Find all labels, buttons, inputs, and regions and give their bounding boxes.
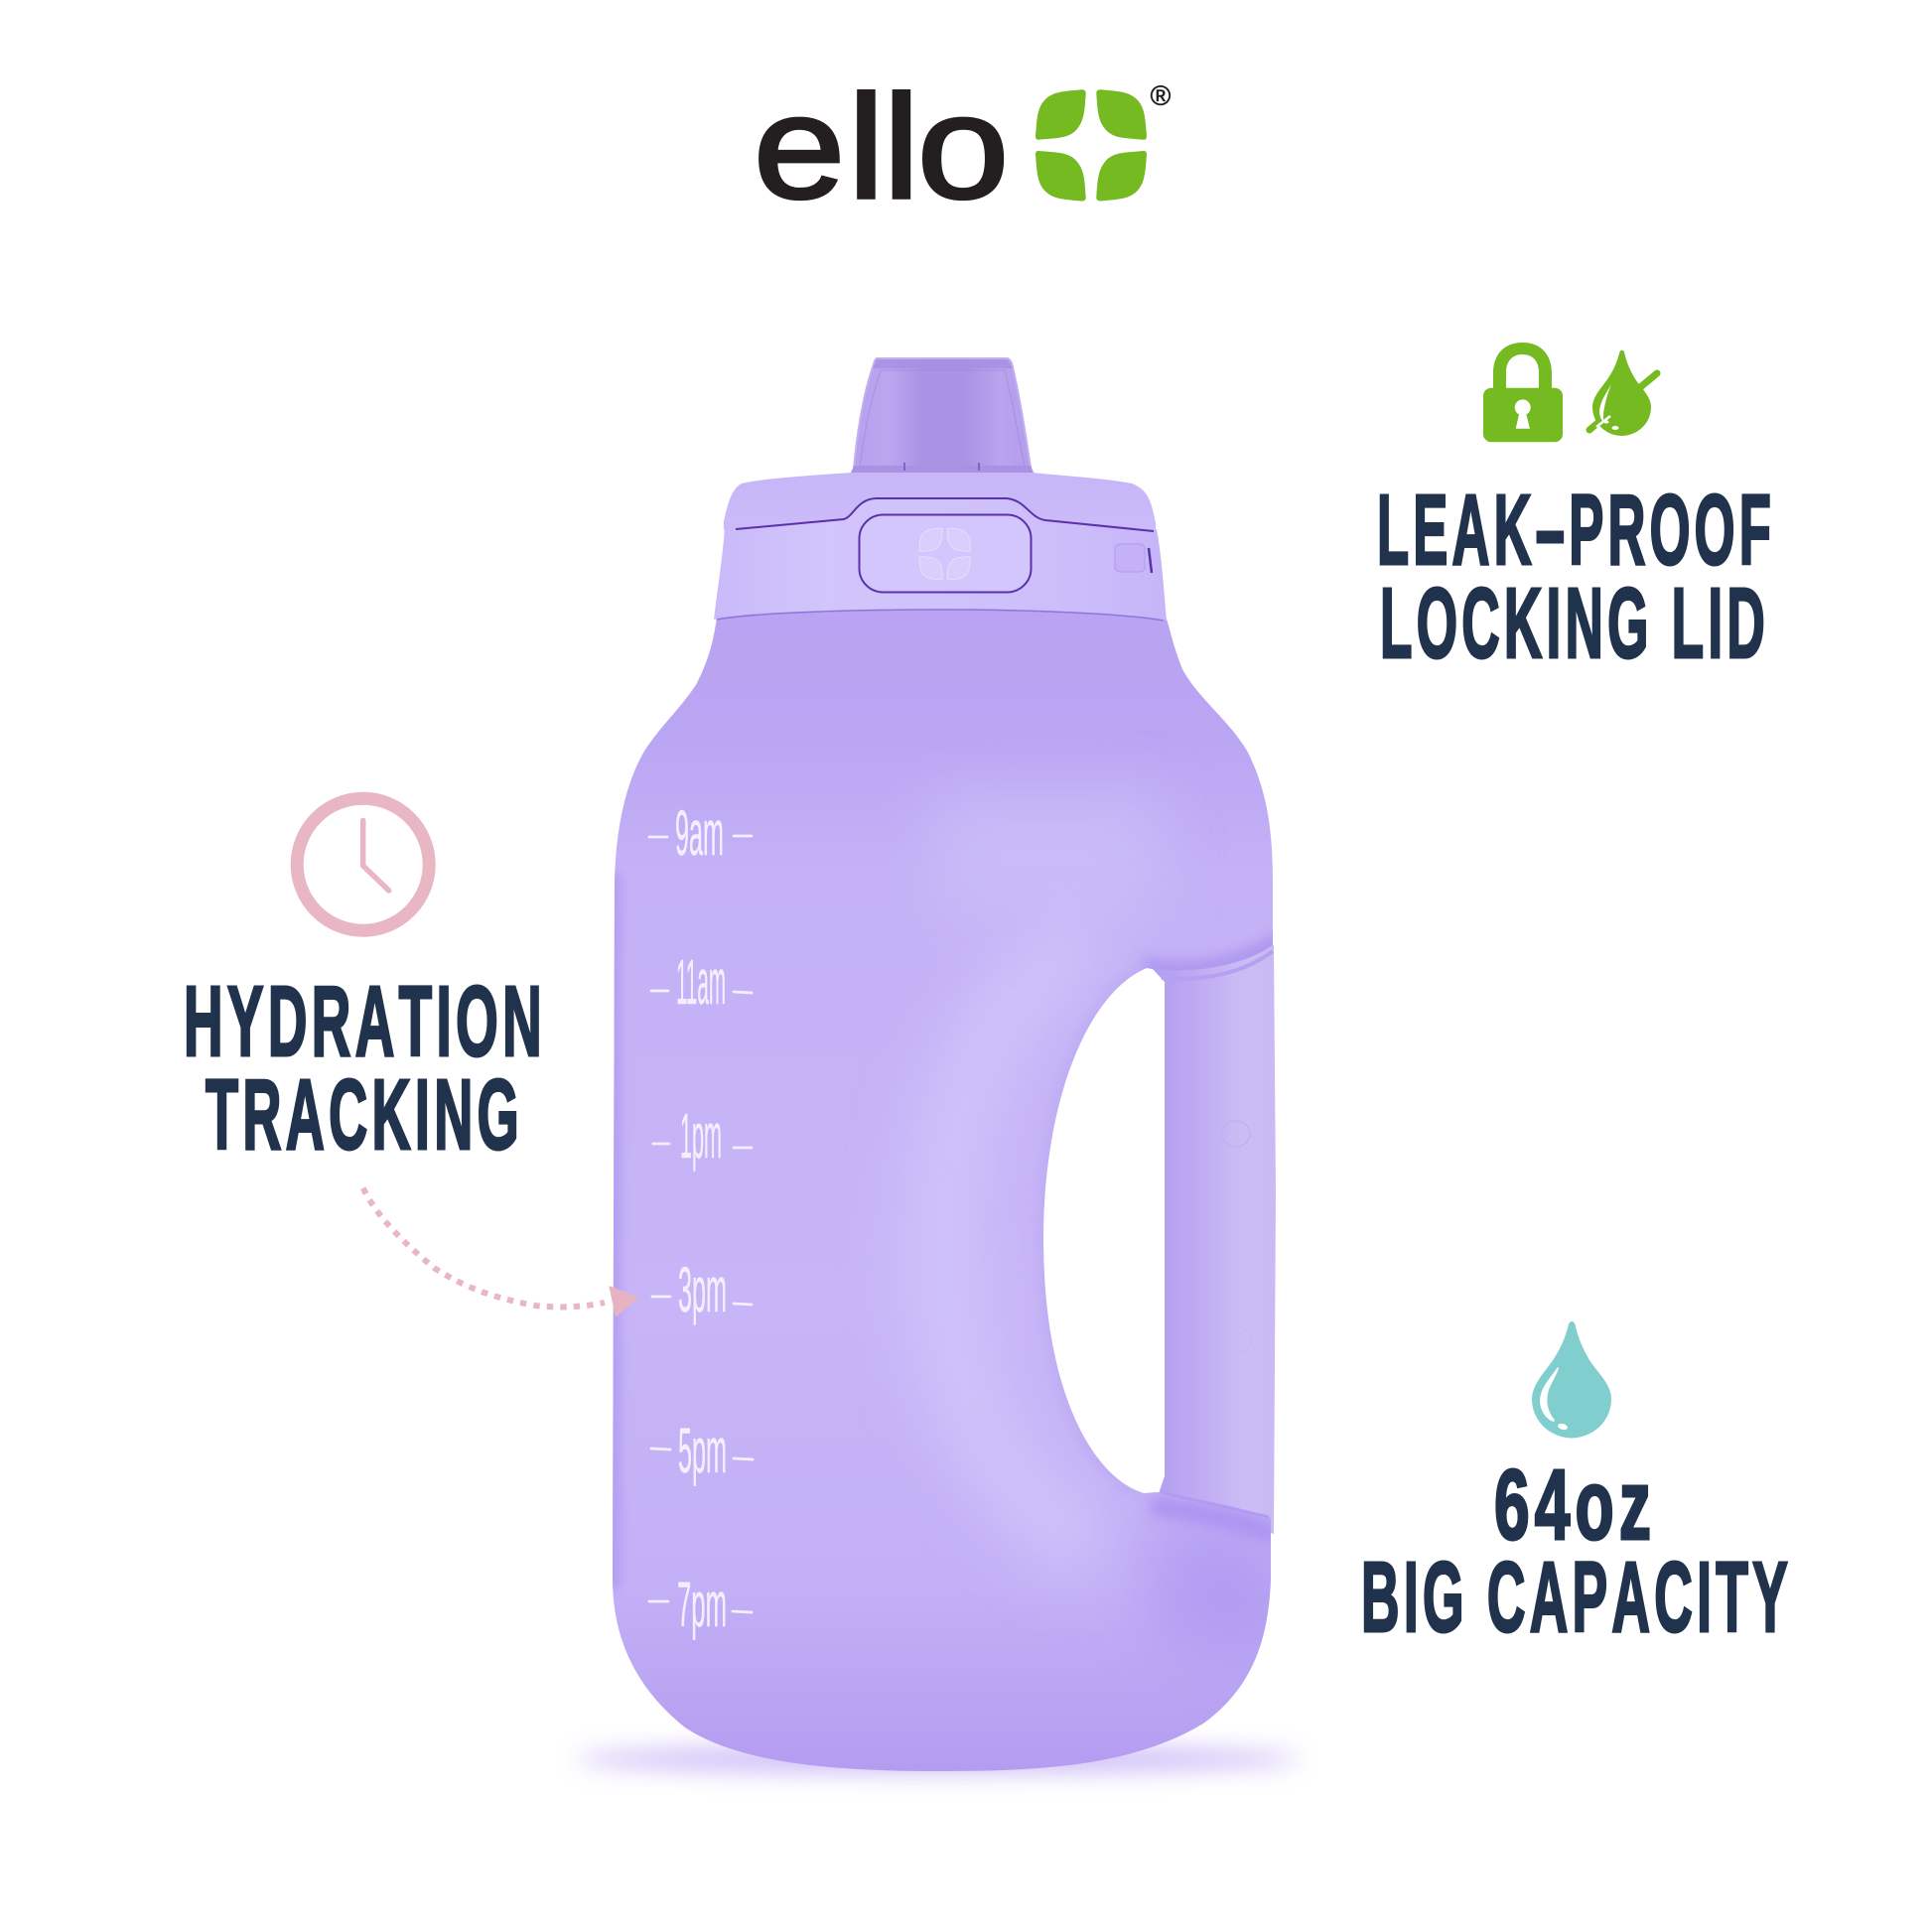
- heading: 64oz: 64oz: [1494, 1449, 1656, 1561]
- lid upper: [724, 473, 1156, 534]
- logo mark: four green leaves: [1035, 89, 1147, 202]
- ground shadow: [576, 1745, 1301, 1773]
- handle dimple top: [1222, 1121, 1250, 1147]
- time marker: 1pm: 1pm: [680, 1100, 722, 1172]
- spout: [851, 358, 1034, 475]
- handle bottom seam shadow: [1162, 1492, 1269, 1517]
- upper light panel: [950, 796, 1146, 895]
- icon: padlock: [1483, 343, 1563, 442]
- logo: ello: [754, 66, 1172, 229]
- upper right shadow: [1142, 938, 1281, 969]
- lid button logo: [919, 528, 970, 580]
- logo wordmark: ello: [754, 66, 1009, 229]
- lid bottom seam: [717, 610, 1164, 621]
- icon: water drop: [1532, 1321, 1611, 1438]
- callout: 64oz big capacity: [1361, 1321, 1792, 1653]
- bottle body: [613, 596, 1273, 1771]
- handle top seam shadow: [1162, 951, 1273, 979]
- time marker: 5pm: [651, 1415, 753, 1486]
- time marker: 5pm: 5pm: [678, 1415, 727, 1486]
- spout inner highlight: [860, 370, 1025, 467]
- lower right shadow: [1148, 1525, 1271, 1666]
- spout base rim: [851, 466, 1034, 474]
- light ridge around handle opening: [943, 933, 1092, 1549]
- time marker: 9am: [649, 797, 752, 869]
- lid seam line: [736, 498, 1154, 531]
- time marker: 3pm: 3pm: [678, 1254, 727, 1325]
- lower seam shadow: [1152, 1505, 1276, 1534]
- lid lower band: [714, 494, 1167, 621]
- left edge shadow: [613, 873, 622, 1590]
- icon: no-leak drop: [1589, 350, 1657, 436]
- time marker: 3pm: [652, 1254, 752, 1325]
- lid side latch: [1115, 544, 1152, 573]
- time marker: 7pm: 7pm: [677, 1569, 727, 1640]
- arrow head: [609, 1286, 639, 1317]
- handle opening edge: [1043, 968, 1147, 1493]
- handle dimple bottom: [1223, 1327, 1251, 1353]
- spout ticks: [904, 463, 979, 471]
- body shading: [606, 794, 1291, 1668]
- bottle: 11am: [676, 946, 726, 1018]
- callout: leak-proof locking lid: [1377, 343, 1775, 679]
- arrow: dotted curve: [363, 1188, 605, 1307]
- bottle: [576, 358, 1301, 1773]
- callout: hydration tracking: [184, 798, 639, 1317]
- spout top rim: [873, 359, 1013, 368]
- heading: hydration: HYDRATION: [184, 966, 546, 1077]
- registered mark: ®: [1151, 80, 1172, 111]
- time marker: 7pm: [649, 1569, 752, 1640]
- time marker: 9am: 9am: [675, 797, 724, 869]
- handle: [1152, 945, 1276, 1534]
- icon: clock: [297, 798, 429, 930]
- time marker: 11am: [651, 946, 752, 1018]
- lid button: [860, 514, 1031, 592]
- time marker: 1pm: [653, 1100, 752, 1172]
- heading: tracking: TRACKING: [206, 1059, 523, 1171]
